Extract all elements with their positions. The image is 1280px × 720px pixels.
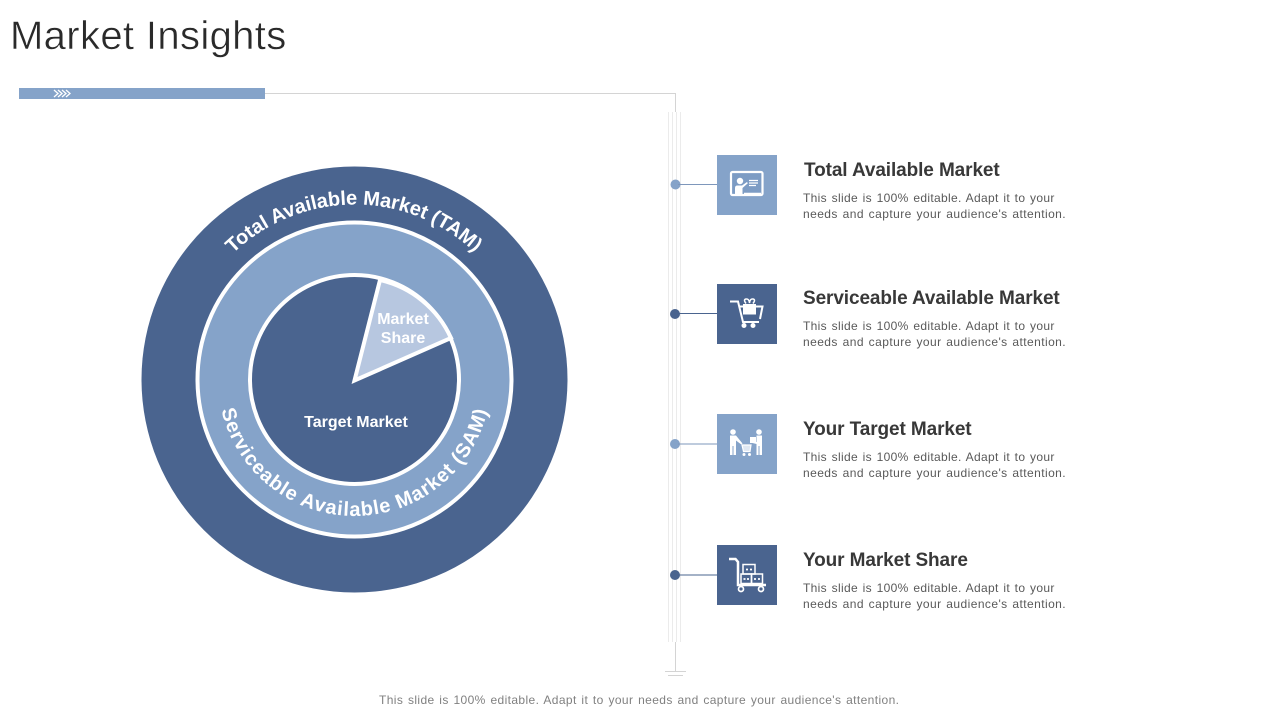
text 1 <box>803 191 1066 221</box>
item 4: your market share <box>670 545 1066 611</box>
item 2: serviceable available market <box>670 284 1066 349</box>
text 2: needs and capture your audience's attention. <box>803 335 1066 349</box>
icon: presenter at board <box>717 155 777 215</box>
title: Market Insights <box>10 14 287 58</box>
heading 1: Total Available Market <box>804 160 1000 181</box>
text 3 <box>803 450 1066 480</box>
connector 1 <box>670 180 717 190</box>
pie slice: market share <box>354 280 451 380</box>
connector 2 <box>670 309 717 319</box>
market circles diagram <box>142 166 568 592</box>
pie slice: market share: Share <box>381 330 425 347</box>
text 2: This slide is 100% editable. Adapt it to your <box>803 319 1055 333</box>
heading 2: Serviceable Available Market <box>803 288 1060 309</box>
outer ring: TAM: Total Available Market (TAM) <box>224 190 482 253</box>
icon: shopping cart with gift <box>717 284 777 344</box>
connector 3 <box>670 439 717 449</box>
text 1: This slide is 100% editable. Adapt it to your <box>803 191 1055 205</box>
inner pie: target market <box>250 275 459 484</box>
icon: trolley with boxes <box>717 545 777 605</box>
text 1: needs and capture your audience's attention. <box>803 207 1066 221</box>
text 4 <box>803 581 1066 611</box>
middle ring: SAM <box>196 220 514 538</box>
timeline <box>665 112 686 676</box>
outer ring: TAM <box>142 166 568 592</box>
text 3: needs and capture your audience's attention. <box>803 466 1066 480</box>
connector 4 <box>670 570 717 580</box>
pie slice: market share: Market <box>377 311 429 328</box>
middle ring: SAM: Serviceable Available Market (SAM) <box>222 408 490 516</box>
text 4: needs and capture your audience's attention. <box>803 597 1066 611</box>
item 1: total available market <box>670 155 1066 221</box>
text 4: This slide is 100% editable. Adapt it to your <box>803 581 1055 595</box>
footer note: This slide is 100% editable. Adapt it to your needs and capture your audience's attention. <box>379 693 899 707</box>
item 3: your target market <box>670 414 1066 480</box>
heading 3: Your Target Market <box>803 419 972 440</box>
header bar with chevrons <box>19 88 676 112</box>
text 2 <box>803 319 1066 349</box>
icon: two people with cart <box>717 414 777 474</box>
text 3: This slide is 100% editable. Adapt it to your <box>803 450 1055 464</box>
inner pie: target market: Target Market <box>304 414 409 431</box>
heading 4: Your Market Share <box>803 550 968 571</box>
